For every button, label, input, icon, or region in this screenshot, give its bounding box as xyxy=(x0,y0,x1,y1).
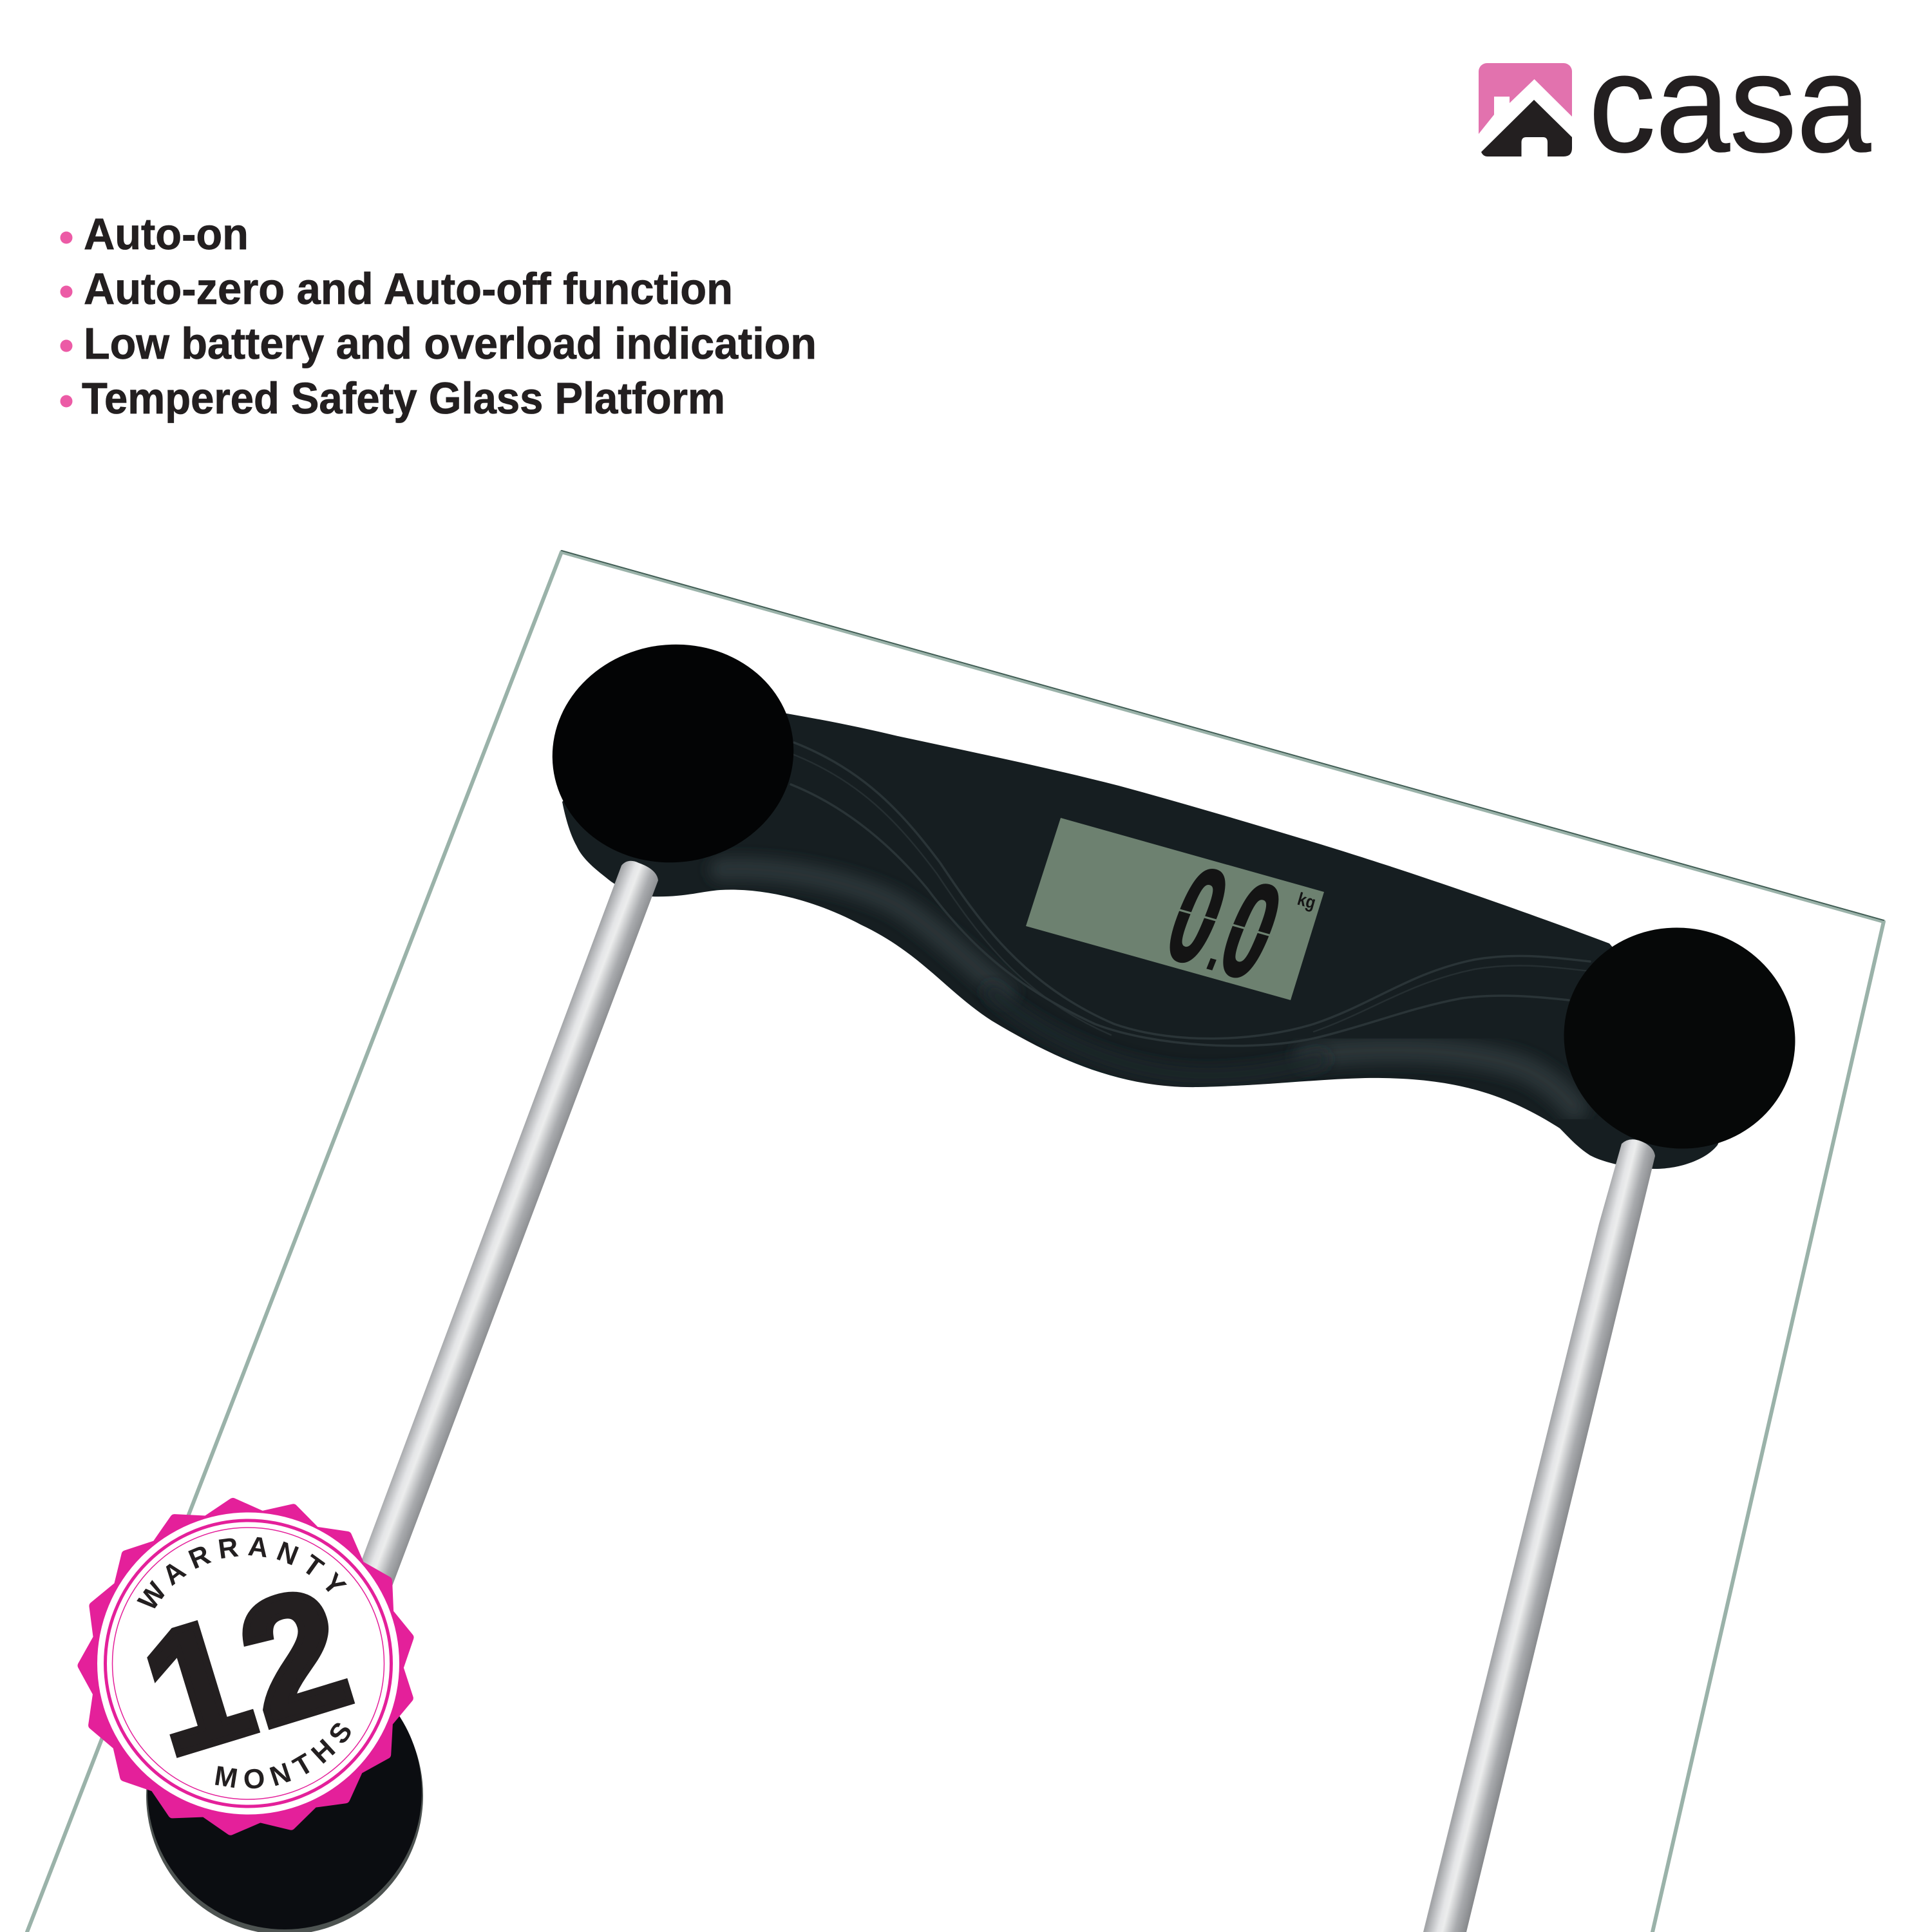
feature list xyxy=(61,209,817,423)
badge rings xyxy=(97,1512,399,1815)
logo icon: pink house tile xyxy=(1479,63,1572,156)
display housing xyxy=(562,702,1739,1169)
lcd panel xyxy=(1026,818,1324,1000)
badge number: 12: 12 xyxy=(123,1548,373,1792)
support rod: right xyxy=(1423,1139,1655,1932)
bathroom scale illustration xyxy=(27,551,1884,1932)
bullet: tempered safety glass: Tempered Safety Glass Platform xyxy=(82,374,725,423)
lcd reading: 0 xyxy=(1202,853,1300,1009)
foot pad: top right xyxy=(1540,904,1819,1173)
foot pad: top left xyxy=(540,630,806,876)
badge label: months: MONTHS xyxy=(215,1723,350,1789)
badge scalloped seal xyxy=(82,1502,410,1831)
logo: casa xyxy=(1479,25,1871,181)
bullet: auto-on: Auto-on xyxy=(84,209,249,259)
bullet: auto-zero and auto-off: Auto-zero and Auto-off function xyxy=(84,264,733,314)
warranty badge xyxy=(77,1498,414,1835)
lcd unit: kg xyxy=(1295,888,1318,913)
badge label: warranty: WARRANTY xyxy=(137,1537,347,1609)
foot pad: bottom left xyxy=(146,1654,423,1932)
lcd display xyxy=(1026,818,1324,1009)
lcd reading: . xyxy=(1200,914,1235,983)
lcd reading xyxy=(1148,838,1301,1009)
logo wordmark: casa xyxy=(1589,25,1871,181)
glass platform outline xyxy=(27,551,1884,1932)
lcd reading: 0 xyxy=(1148,838,1247,993)
support rod: left xyxy=(348,861,658,1610)
bullet: low battery and overload: Low battery and overload indication xyxy=(84,319,817,368)
